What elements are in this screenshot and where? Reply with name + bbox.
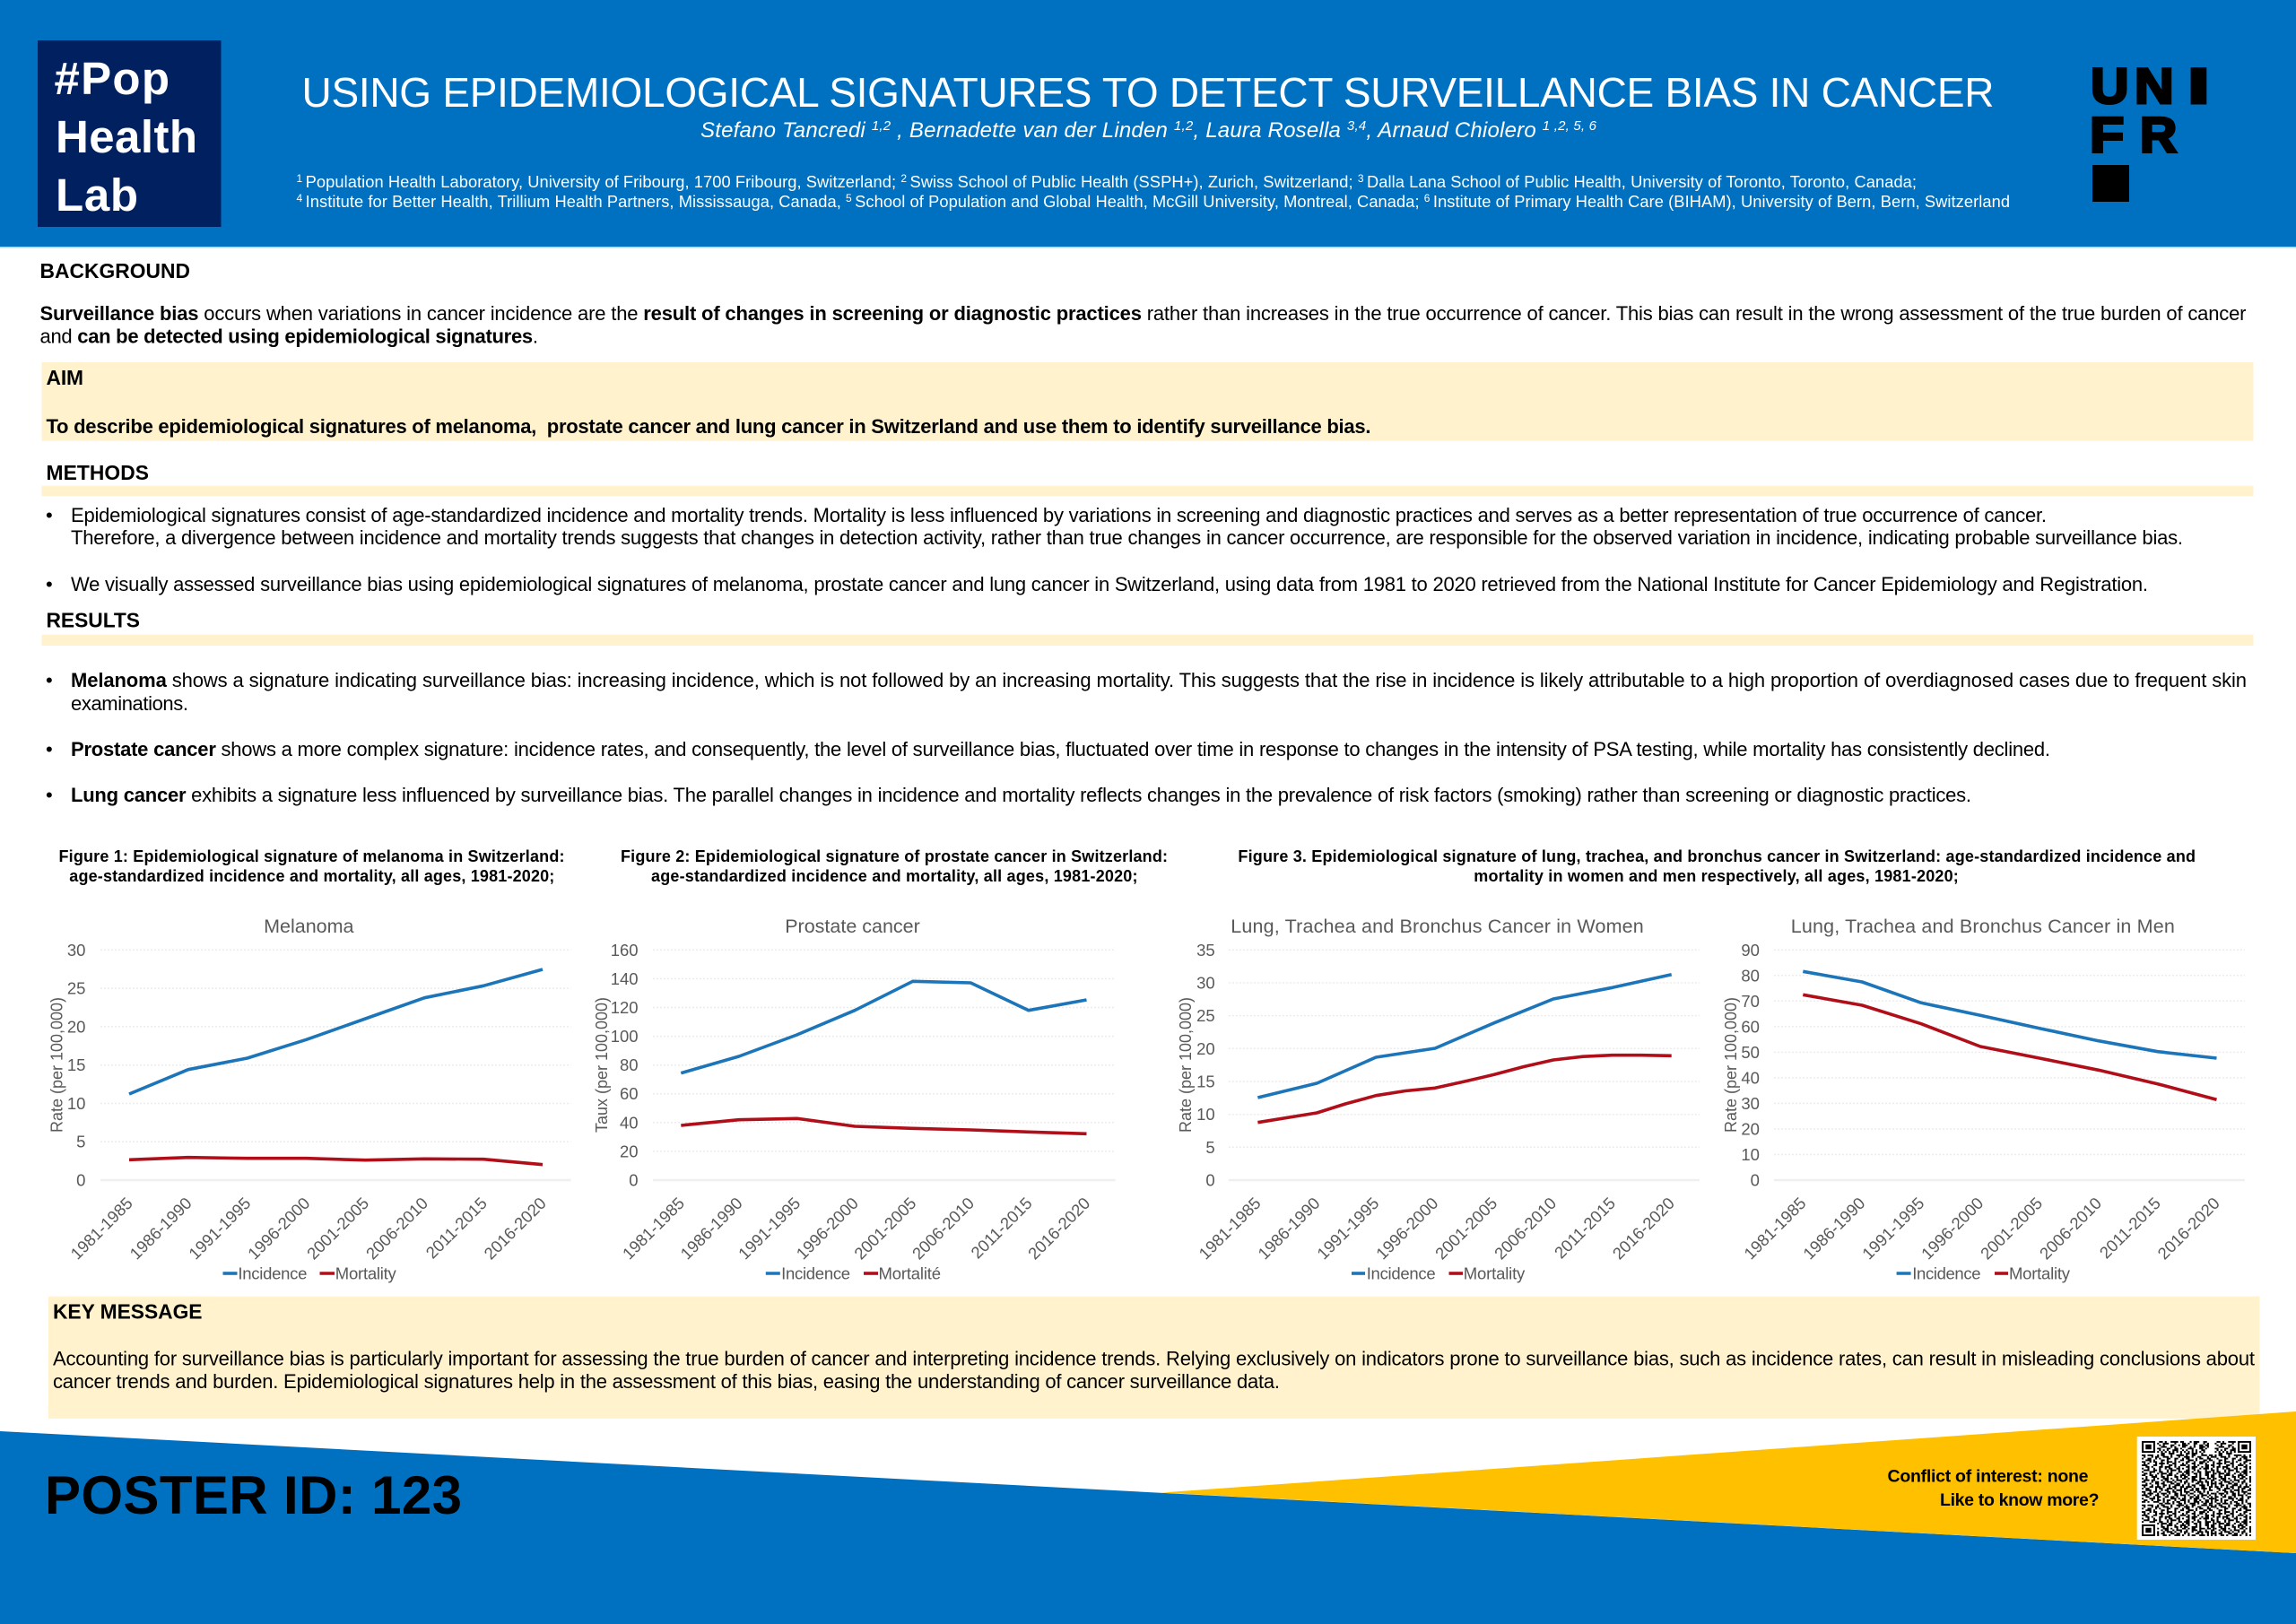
results bullet: lung cancer: • <box>46 784 53 806</box>
y axis ticks: 30 <box>1196 974 1215 992</box>
x axis labels: 2001-2005 <box>1431 1194 1500 1263</box>
figure 1 caption: age-standardized incidence and mortality, all ages, 1981-2020; <box>69 867 554 885</box>
footer blue band <box>0 1431 2296 1624</box>
mortality line <box>129 1158 543 1165</box>
x axis labels: 2011-2015 <box>1551 1194 1619 1262</box>
chart title: women: Lung, Trachea and Bronchus Cancer in Women <box>1231 916 1644 937</box>
y axis ticks <box>611 941 639 1189</box>
chart title: prostate cancer: Prostate cancer <box>785 916 920 937</box>
logo: Pop Health Lab: Lab <box>56 169 138 221</box>
y axis ticks: 15 <box>67 1055 85 1074</box>
x axis labels: 1986-1990 <box>1254 1194 1324 1263</box>
y axis ticks: 5 <box>1205 1138 1215 1157</box>
figure 3 caption: Figure 3. Epidemiological signature of lung, trachea, and bronchus cancer in Switzerland: age-standardized incidence and <box>1238 847 2196 865</box>
authors: 1,2 <box>1174 118 1194 134</box>
legend <box>766 1264 941 1283</box>
chart: lung cancer in women <box>1177 916 1700 1283</box>
y axis ticks: 60 <box>1741 1017 1760 1036</box>
chart: prostate cancer <box>593 916 1116 1283</box>
figure 1 caption: Figure 1: Epidemiological signature of melanoma in Switzerland: <box>59 847 565 865</box>
y axis ticks <box>1741 941 1760 1189</box>
affiliations: School of Population and Global Health, McGill University, Montreal, Canada; <box>855 192 1424 211</box>
x axis labels <box>1195 1194 1678 1263</box>
legend: Mortality <box>1464 1264 1526 1283</box>
y axis ticks: 0 <box>1751 1171 1760 1189</box>
legend <box>222 1264 397 1283</box>
key message panel <box>48 1297 2260 1419</box>
chart: lung cancer in men <box>1722 916 2245 1283</box>
x axis labels: 2016-2020 <box>480 1194 550 1263</box>
x axis labels: 1981-1985 <box>1740 1194 1810 1263</box>
authors: 1 ,2, 5, 6 <box>1543 118 1597 134</box>
y axis title: Rate (per 100,000) <box>48 997 65 1133</box>
y axis ticks: 40 <box>620 1113 639 1132</box>
mortality line <box>1803 994 2217 1099</box>
heading: background: BACKGROUND <box>39 259 190 282</box>
x axis labels: 2016-2020 <box>2153 1194 2223 1263</box>
x axis labels: 2006-2010 <box>362 1194 431 1263</box>
x axis labels: 1986-1990 <box>1799 1194 1869 1263</box>
results bullet: melanoma: examinations. <box>71 692 188 715</box>
incidence line <box>1257 975 1672 1098</box>
y axis ticks: 120 <box>611 998 639 1017</box>
legend: Mortality <box>2009 1264 2071 1283</box>
aim text: To describe epidemiological signatures of melanoma, prostate cancer and lung cancer in Switzerland and use them to identify surveillance bias. <box>47 415 1370 438</box>
x axis labels: 2016-2020 <box>1024 1194 1093 1263</box>
affiliations: Swiss School of Public Health (SSPH+), Zurich, Switzerland; <box>909 172 1358 191</box>
affiliations: Institute for Better Health, Trillium Health Partners, Mississauga, Canada, <box>306 192 846 211</box>
QR code <box>2136 1437 2256 1540</box>
x axis labels: 1981-1985 <box>66 1194 136 1263</box>
results bullet: prostate cancer: • <box>46 738 53 760</box>
background text: Surveillance bias occurs when variations in cancer incidence are the result of changes in screening or diagnostic practices rather than increases in the true occurrence of cancer. This bias can result in the wrong assessment of the true burden of cancer <box>39 302 2246 325</box>
x axis labels <box>66 1194 550 1263</box>
y axis title: Rate (per 100,000) <box>1177 997 1195 1133</box>
y axis ticks: 35 <box>1196 941 1215 960</box>
conflict of interest note <box>1887 1467 2099 1510</box>
figure 2 caption <box>621 847 1168 885</box>
y axis ticks: 20 <box>1741 1119 1760 1139</box>
results bullet: lung cancer: Lung cancer exhibits a signature less influenced by surveillance bias. The parallel changes in incidence and mortality reflects changes in the prevalence of risk factors (smoking) rather than screening or diagnostic practices. <box>71 784 1971 806</box>
y axis ticks: 20 <box>67 1017 85 1036</box>
affiliations: 1 <box>296 172 306 185</box>
y axis ticks: 0 <box>76 1171 85 1189</box>
incidence line <box>1803 971 2217 1058</box>
y axis ticks: 140 <box>611 969 639 988</box>
figure 2 caption: Figure 2: Epidemiological signature of prostate cancer in Switzerland: <box>621 847 1168 865</box>
logo: UNI FR: U <box>2091 58 2128 115</box>
conflict of interest note: Like to know more? <box>1940 1490 2099 1510</box>
key message text <box>53 1348 2255 1393</box>
y axis ticks: 0 <box>1205 1171 1215 1189</box>
y axis title: Rate (per 100,000) <box>1722 997 1740 1133</box>
incidence line <box>681 981 1087 1073</box>
affiliations: 6 <box>1424 192 1433 204</box>
x axis labels: 1996-2000 <box>1918 1194 1987 1263</box>
x axis labels: 1991-1995 <box>1858 1194 1927 1263</box>
x axis labels: 1996-2000 <box>244 1194 313 1263</box>
background text <box>39 302 2246 347</box>
footer yellow wedge <box>1161 1411 2296 1553</box>
mortality line <box>681 1118 1087 1133</box>
figure 3 caption <box>1238 847 2196 885</box>
x axis labels: 2001-2005 <box>303 1194 372 1263</box>
y axis ticks: 60 <box>620 1084 639 1103</box>
logo: Pop Health Lab: #Pop <box>54 53 170 104</box>
y axis ticks: 80 <box>620 1055 639 1074</box>
x axis labels: 2011-2015 <box>422 1194 491 1262</box>
logo: UNI FR <box>2090 57 2210 202</box>
x axis labels: 1991-1995 <box>185 1194 255 1263</box>
affiliations <box>296 172 2010 211</box>
results bullet: melanoma <box>46 669 2247 715</box>
logo: UNI FR: R <box>2140 107 2177 162</box>
figure 3 caption: mortality in women and men respectively, all ages, 1981-2020; <box>1474 867 1959 885</box>
aim panel <box>41 362 2253 441</box>
legend: Mortality <box>335 1264 397 1283</box>
legend <box>1897 1264 2071 1283</box>
logo: Pop Health Lab <box>38 40 221 227</box>
background text: and can be detected using epidemiological signatures. <box>39 325 538 347</box>
logo: UNI FR: I <box>2187 57 2210 114</box>
authors: , Laura Rosella <box>1193 118 1347 143</box>
y axis ticks: 15 <box>1196 1073 1215 1090</box>
y axis ticks: 25 <box>67 979 85 998</box>
legend: Incidence <box>781 1264 850 1283</box>
y axis ticks: 80 <box>1741 966 1760 985</box>
y axis ticks: 90 <box>1741 941 1760 960</box>
authors: , Arnaud Chiolero <box>1366 118 1543 143</box>
affiliations: 3 <box>1358 172 1367 185</box>
methods bullet 2: • <box>46 573 53 595</box>
legend: Incidence <box>1367 1264 1436 1283</box>
y axis ticks: 25 <box>1196 1006 1215 1025</box>
authors: 3,4 <box>1347 118 1366 134</box>
x axis labels: 1981-1985 <box>1195 1194 1265 1263</box>
y axis ticks: 20 <box>1196 1039 1215 1058</box>
methods bullet 1: • <box>46 504 53 526</box>
affiliations: 5 <box>846 192 855 204</box>
conflict of interest note: Conflict of interest: none <box>1887 1467 2089 1487</box>
y axis ticks: 40 <box>1741 1068 1760 1087</box>
x axis labels: 2006-2010 <box>909 1194 978 1263</box>
heading: results: RESULTS <box>47 608 140 631</box>
methods bullet 2: We visually assessed surveillance bias using epidemiological signatures of melanoma, prostate cancer and lung cancer in Switzerland, using data from 1981 to 2020 retrieved from the National Institute for Cancer Epidemiology and Registration. <box>71 573 2148 595</box>
y axis ticks: 70 <box>1741 992 1760 1011</box>
x axis labels: 2011-2015 <box>2096 1194 2164 1262</box>
x axis labels: 1991-1995 <box>1313 1194 1383 1263</box>
y axis ticks: 10 <box>1196 1105 1215 1124</box>
mortality line <box>1257 1055 1672 1123</box>
methods bullet 1: Epidemiological signatures consist of age-standardized incidence and mortality trends. Mortality is less influenced by variations in screening and diagnostic practices and serves as a better representation of true occurrence of cancer. <box>71 504 2047 526</box>
methods bullet 1: Therefore, a divergence between incidence and mortality trends suggests that changes in detection activity, rather than true changes in cancer occurrence, are responsible for the observed variation in incidence, indicating probable surveillance bias. <box>71 526 2183 549</box>
results bullet: melanoma: Melanoma shows a signature indicating surveillance bias: increasing incidence, which is not followed by an increasing mortality. This suggests that the rise in incidence is likely attributable to a high proportion of overdiagnosed cases due to frequent skin <box>71 669 2247 691</box>
x axis labels: 2006-2010 <box>2036 1194 2105 1263</box>
x axis labels: 1986-1990 <box>676 1194 746 1263</box>
background section <box>39 259 2246 347</box>
x axis labels: 1991-1995 <box>735 1194 804 1263</box>
y axis ticks <box>1196 941 1215 1189</box>
authors: 1,2 <box>872 118 891 134</box>
poster id: POSTER ID: 123 <box>45 1465 462 1525</box>
x axis labels <box>619 1194 1093 1263</box>
title: USING EPIDEMIOLOGICAL SIGNATURES TO DETECT SURVEILLANCE BIAS IN CANCER <box>301 69 1995 116</box>
chart title: men: Lung, Trachea and Bronchus Cancer in Men <box>1791 916 2175 937</box>
affiliations: Dalla Lana School of Public Health, University of Toronto, Toronto, Canada; <box>1367 172 1917 191</box>
y axis ticks: 0 <box>629 1171 639 1189</box>
header band <box>0 0 2296 248</box>
logo: Pop Health Lab: Health <box>56 111 197 162</box>
legend <box>1352 1264 1526 1283</box>
x axis labels: 1996-2000 <box>793 1194 862 1263</box>
x axis labels <box>1740 1194 2223 1263</box>
affiliations: 2 <box>900 172 909 185</box>
results bullet: prostate cancer: Prostate cancer shows a more complex signature: incidence rates, and consequently, the level of surveillance bias, fluctuated over time in response to changes in the intensity of PSA testing, while mortality has consistently declined. <box>71 738 2050 760</box>
results bullet: melanoma: • <box>46 669 53 691</box>
heading: methods: METHODS <box>47 461 149 484</box>
x axis labels: 2016-2020 <box>1609 1194 1678 1263</box>
figure 1 caption <box>59 847 565 885</box>
logo: UNI FR: F <box>2090 107 2124 163</box>
x axis labels: 1986-1990 <box>126 1194 196 1263</box>
x axis labels: 1996-2000 <box>1372 1194 1441 1263</box>
y axis ticks: 30 <box>67 941 85 960</box>
y axis ticks: 5 <box>76 1133 85 1151</box>
heading: key message: KEY MESSAGE <box>53 1300 203 1324</box>
heading: aim: AIM <box>47 366 83 389</box>
figure 2 caption: age-standardized incidence and mortality, all ages, 1981-2020; <box>651 867 1137 885</box>
methods section <box>41 461 2253 595</box>
y axis ticks: 20 <box>620 1142 639 1160</box>
y axis ticks: 160 <box>611 941 639 960</box>
x axis labels: 2011-2015 <box>967 1194 1036 1262</box>
y axis ticks: 10 <box>1741 1145 1760 1164</box>
legend: Incidence <box>238 1264 307 1283</box>
key message text: cancer trends and burden. Epidemiological signatures help in the assessment of this bias, easing the understanding of cancer surveillance data. <box>53 1370 1280 1393</box>
methods bullet 1 <box>46 504 2183 549</box>
chart: melanoma <box>48 916 571 1283</box>
authors: , Bernadette van der Linden <box>891 118 1174 143</box>
authors: Stefano Tancredi <box>700 118 865 143</box>
affiliations: 4 <box>296 192 306 204</box>
y axis ticks <box>67 941 85 1189</box>
y axis title: Taux (per 100,000) <box>593 997 611 1133</box>
logo: UNI FR: N <box>2135 58 2174 114</box>
x axis labels: 2006-2010 <box>1491 1194 1560 1263</box>
key message text: Accounting for surveillance bias is particularly important for assessing the true burden of cancer and interpreting incidence trends. Relying exclusively on indicators prone to surveillance bias, such as incidence rates, can result in misleading conclusions about <box>53 1348 2255 1370</box>
results section <box>41 608 2253 806</box>
x axis labels: 1981-1985 <box>619 1194 688 1263</box>
y axis ticks: 50 <box>1741 1043 1760 1062</box>
legend: Incidence <box>1912 1264 1980 1283</box>
y axis ticks: 30 <box>1741 1094 1760 1113</box>
y axis ticks: 10 <box>67 1094 85 1113</box>
x axis labels: 2001-2005 <box>850 1194 920 1263</box>
affiliations: Population Health Laboratory, University of Fribourg, 1700 Fribourg, Switzerland; <box>306 172 900 191</box>
affiliations: Institute of Primary Health Care (BIHAM), University of Bern, Bern, Switzerland <box>1433 192 2010 211</box>
incidence line <box>129 969 543 1094</box>
x axis labels: 2001-2005 <box>1977 1194 2046 1263</box>
y axis ticks: 100 <box>611 1027 639 1046</box>
chart title: melanoma: Melanoma <box>264 916 354 937</box>
legend: Mortalité <box>879 1264 941 1283</box>
